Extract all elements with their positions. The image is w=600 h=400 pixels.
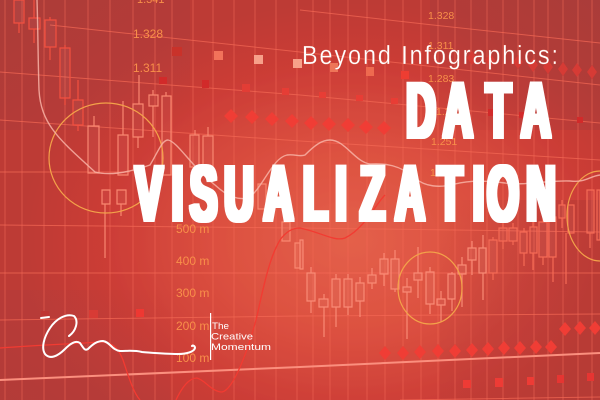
heading: visualization: VISUALIZATION [135, 150, 556, 238]
chart: axis numbers: 400 m [176, 254, 209, 268]
bright horizontal line [0, 353, 600, 380]
logo: divider [210, 313, 211, 360]
chart: trend line pale [37, 0, 600, 199]
chart: axis numbers: 1.251 [431, 136, 457, 148]
chart: axis numbers: 300 m [176, 286, 209, 300]
chart: axis numbers: 1.311 [133, 61, 162, 75]
chart: axis numbers: 1.267 [436, 106, 462, 118]
chart: axis numbers: 200 m [176, 319, 209, 333]
logo: wordmark: Momentum [211, 342, 271, 353]
chart: axis numbers: 1.24 [430, 167, 451, 179]
chart: candlesticks lower right [489, 190, 600, 284]
chart: axis numbers: 1.311 [428, 40, 454, 52]
chart: axis numbers: 1.328 [428, 10, 454, 22]
chart: diamond markers [224, 51, 600, 360]
chart: trend line red [0, 195, 385, 400]
heading: data: DATA [406, 67, 551, 155]
logo: signature mark [41, 315, 195, 357]
logo: wordmark: Creative [211, 332, 253, 342]
logo: wordmark: The [212, 321, 229, 332]
chart: highlight circles [49, 103, 600, 324]
chart: axis numbers: 100 m [176, 351, 209, 365]
chart: candlesticks centre [88, 75, 300, 268]
chart: axis numbers: 500 m [176, 222, 209, 236]
logo: wordmark [211, 321, 271, 353]
chart: axis numbers: 1.283 [428, 73, 454, 85]
chart: axis numbers: 1.328 [133, 27, 163, 41]
chart: square markers [41, 47, 594, 388]
chart: candlesticks lower [300, 235, 486, 339]
chart: axis numbers [133, 0, 462, 365]
chart: candlesticks upper left [14, 0, 83, 131]
logo: the creative momentum [41, 313, 271, 360]
heading: beyond infographics: Beyond Infographics: [302, 42, 558, 70]
